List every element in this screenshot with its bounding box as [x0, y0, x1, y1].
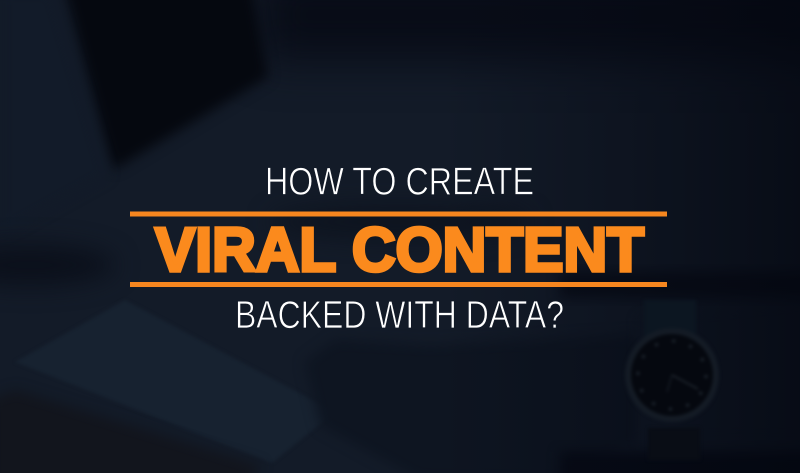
title: viral content: VIRAL CONTENT: [155, 216, 644, 285]
icon: wrist watch: [625, 300, 719, 460]
bottom right dark: [560, 452, 800, 473]
dark band above arm: [560, 272, 800, 298]
notebook: [15, 300, 335, 463]
monitor shadow: [63, 0, 268, 170]
desk below notebook: [0, 390, 262, 473]
dark desk band left: [0, 245, 115, 285]
top dark area: [260, 0, 800, 60]
forearm: [640, 300, 800, 440]
hand and arm: [305, 335, 640, 473]
bottom orange rule: [130, 282, 667, 287]
title: backed with data: BACKED WITH DATA?: [235, 294, 564, 337]
title: how to create: HOW TO CREATE: [265, 160, 534, 204]
shadow behind title: [270, 206, 530, 238]
top orange rule: [130, 212, 667, 216]
monitor edge highlight: [0, 0, 108, 235]
